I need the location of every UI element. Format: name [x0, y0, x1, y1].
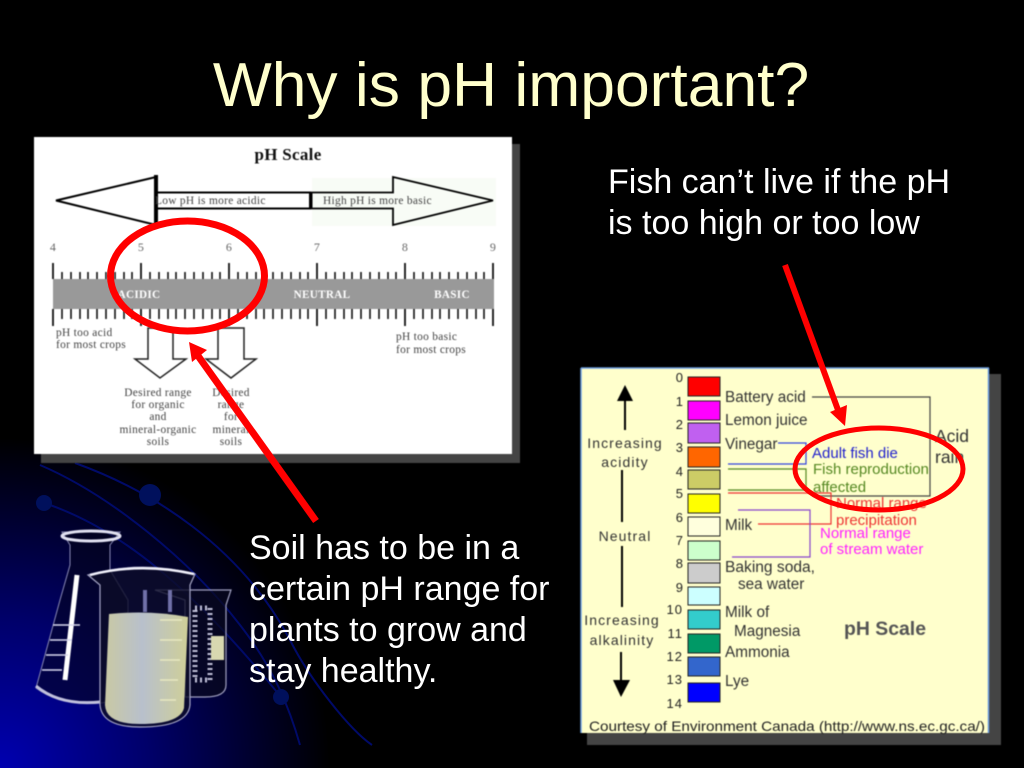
axis arrows	[613, 385, 633, 697]
substance labels: Vinegar	[725, 436, 777, 453]
large beaker	[88, 567, 195, 727]
range labels: Normal range	[820, 525, 911, 542]
substance labels: sea water	[738, 576, 804, 593]
desired range captions: soils	[147, 436, 169, 448]
scale numbers 0 to 14: 5	[676, 486, 683, 501]
range labels: Fish reproduction	[813, 461, 929, 478]
chart heading: pH Scale	[254, 145, 322, 164]
range labels: of stream water	[820, 541, 923, 558]
scale numbers: 5	[138, 240, 144, 254]
gray acidity bar: ACIDIC	[118, 289, 160, 301]
desired range captions: Desired	[212, 387, 250, 399]
scale numbers 0 to 14: 7	[676, 533, 683, 548]
desired range captions: mineral-organic	[119, 424, 197, 436]
swatches	[688, 377, 720, 702]
scale numbers 0 to 14: 10	[667, 602, 683, 617]
icon: laboratory glassware	[36, 531, 231, 727]
small beaker	[155, 590, 231, 697]
ruler ticks	[53, 263, 493, 326]
scale numbers: 9	[490, 240, 496, 254]
desired range captions	[119, 387, 250, 448]
acid rain label: rain	[935, 447, 964, 467]
text block: fish	[608, 163, 950, 242]
text block: soil: plants to grow and	[249, 611, 527, 649]
desired range down arrows	[135, 328, 256, 378]
scale numbers: 6	[226, 240, 232, 254]
scale numbers 0 to 14: 12	[667, 649, 683, 664]
chart name: pH Scale	[844, 619, 926, 640]
range bracket lines	[728, 397, 930, 557]
text block: soil: stay healthy.	[249, 652, 437, 690]
arrow: fish text to chart	[785, 265, 847, 426]
substance labels: Lye	[725, 673, 749, 690]
axis labels: alkalinity	[590, 632, 654, 648]
axis labels: Increasing	[587, 435, 663, 451]
crop limit notes: for most crops	[396, 344, 466, 356]
gray acidity bar: NEUTRAL	[294, 289, 350, 301]
scale numbers 0 to 14: 14	[667, 696, 683, 711]
arrow captions: High pH is more basic	[323, 195, 432, 207]
text block: fish: Fish can’t live if the pH	[608, 163, 950, 201]
panel: water pH scale chart	[581, 368, 1001, 745]
scale numbers 0 to 14: 11	[668, 626, 683, 641]
substance labels: Magnesia	[734, 623, 801, 640]
desired range captions: and	[149, 411, 167, 423]
desired range captions: soils	[220, 436, 242, 448]
scale numbers 0 to 14: 1	[676, 394, 683, 409]
scale numbers 0 to 14: 2	[676, 417, 683, 432]
crop limit notes: pH too basic	[396, 331, 457, 343]
desired range captions: for	[224, 411, 238, 423]
scale numbers	[50, 240, 496, 254]
axis labels	[584, 435, 663, 648]
text block: fish: is too high or too low	[608, 204, 920, 242]
substance labels: Milk of	[725, 604, 770, 621]
range labels: Normal range	[836, 495, 927, 512]
arrow captions	[155, 195, 432, 207]
text block: soil: Soil has to be in a	[249, 529, 519, 567]
callout: fish range ellipse	[795, 428, 963, 510]
scale numbers 0 to 14: 4	[676, 464, 683, 479]
source credit: Courtesy of Environment Canada (http://www.ns.ec.gc.ca/)	[589, 718, 985, 734]
acid rain label	[935, 426, 969, 467]
arrow: soil text to chart	[189, 342, 316, 521]
substance labels	[725, 389, 815, 690]
range labels	[812, 445, 929, 558]
crop limit notes	[56, 327, 466, 356]
scale numbers 0 to 14: 8	[676, 556, 683, 571]
panel: soil pH scale chart	[34, 137, 520, 463]
background orbit lines	[36, 463, 372, 745]
text block: soil: certain pH range for	[249, 570, 550, 608]
desired range captions: mineral	[213, 424, 249, 436]
text block: soil	[249, 529, 550, 690]
flask	[36, 531, 128, 703]
crop limit notes: pH too acid	[56, 327, 112, 339]
scale numbers 0 to 14: 9	[676, 580, 683, 595]
substance labels: Ammonia	[725, 644, 790, 661]
desired range captions: for organic	[131, 399, 185, 411]
scale numbers: 8	[402, 240, 408, 254]
desired range captions: range	[218, 399, 244, 411]
scale numbers: 7	[314, 240, 320, 254]
substance labels: Baking soda,	[725, 559, 815, 576]
substance labels: Milk	[725, 517, 753, 534]
callout: soil range ellipse	[110, 221, 264, 331]
gray acidity bar: BASIC	[434, 289, 470, 301]
axis labels: acidity	[601, 454, 649, 470]
acid rain label: Acid	[935, 426, 969, 446]
scale numbers 0 to 14	[667, 370, 683, 711]
scale numbers 0 to 14: 13	[667, 672, 683, 687]
desired range captions: Desired range	[124, 387, 192, 399]
range labels: affected	[813, 479, 866, 496]
scale numbers: 4	[50, 240, 56, 254]
double arrow	[56, 175, 493, 226]
scale numbers 0 to 14: 6	[676, 510, 683, 525]
axis labels: Increasing	[584, 612, 660, 628]
scale numbers 0 to 14: 0	[676, 370, 683, 385]
axis labels: Neutral	[599, 528, 651, 544]
substance labels: Battery acid	[725, 389, 806, 406]
range labels: precipitation	[836, 512, 917, 529]
crop limit notes: for most crops	[56, 339, 126, 351]
range labels: Adult fish die	[812, 445, 898, 462]
substance labels: Lemon juice	[725, 412, 807, 429]
scale numbers 0 to 14: 3	[676, 440, 683, 455]
title: Why is pH important?	[213, 51, 809, 120]
arrow captions: Low pH is more acidic	[155, 195, 266, 207]
gray acidity bar	[53, 279, 494, 309]
